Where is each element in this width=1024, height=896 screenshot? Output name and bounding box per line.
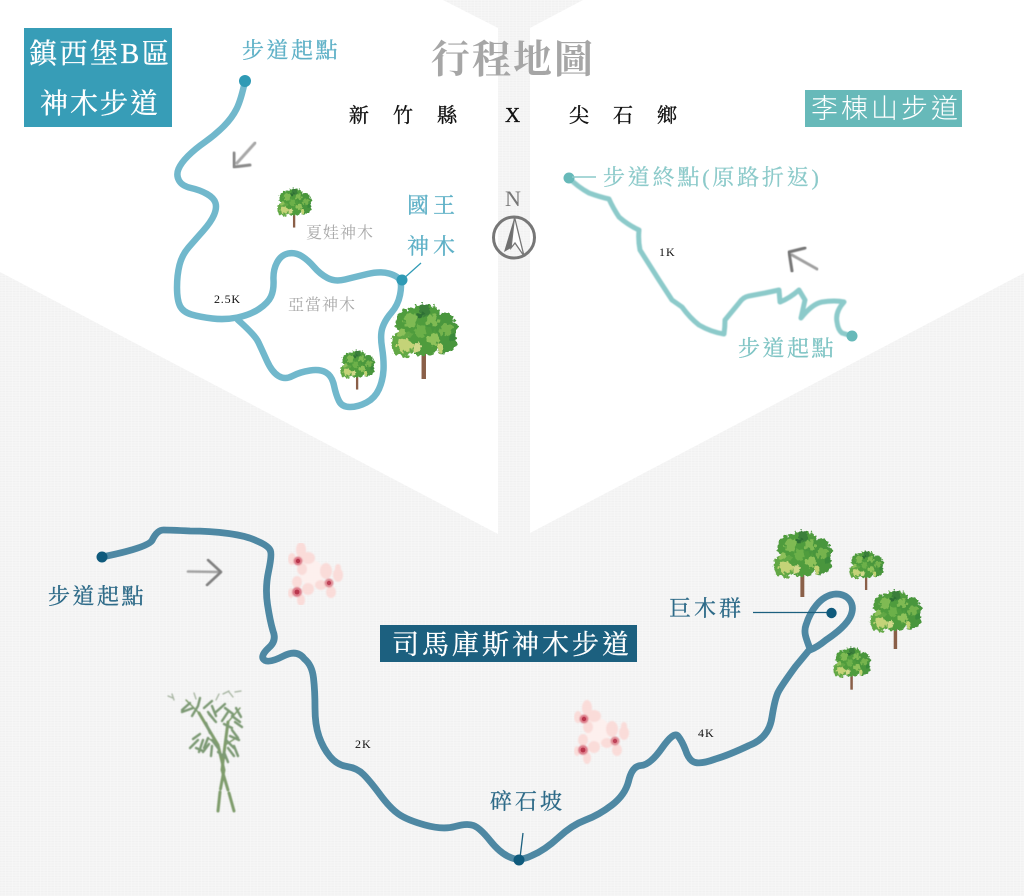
leader line and marker: King tree (396, 263, 421, 286)
compass: N (505, 186, 521, 211)
end point marker (564, 172, 596, 184)
subtitle: county and township: 新竹縣 (349, 104, 481, 127)
heading box: Smangus: 司馬庫斯神木步道 (392, 630, 632, 660)
tree group: giant trees (773, 531, 921, 690)
label: distance 4K: 4K (698, 726, 715, 740)
tree: Eve (277, 188, 311, 228)
label: King sacred tree: 神木 (407, 234, 459, 259)
start point marker (239, 75, 251, 87)
label: trail start: 步道起點 (242, 38, 340, 63)
label: distance 2.5K: 2.5K (214, 292, 241, 306)
white panel: left upper region (0, 0, 498, 534)
label: trail start: 步道起點 (48, 584, 146, 609)
label: distance 2K: 2K (355, 737, 372, 751)
subtitle: county and township: X (505, 103, 520, 127)
label: King sacred tree (407, 193, 459, 259)
trail line: Smangus (102, 530, 852, 859)
direction arrow (188, 560, 221, 585)
panel: Smangus trail (48, 530, 921, 866)
tree: Adam (340, 350, 374, 390)
bamboo (168, 691, 242, 811)
heading box: Zhenxibao: 神木步道 (40, 88, 160, 120)
heading box: Lidong: 李棟山步道 (811, 94, 961, 124)
label: Eve sacred tree: 夏娃神木 (306, 224, 374, 242)
label: gravel slope: 碎石坡 (490, 789, 565, 814)
blossom cluster: upper (288, 542, 343, 606)
compass (494, 186, 534, 258)
subtitle: county and township: 尖石鄉 (569, 104, 701, 127)
direction arrow (789, 248, 817, 271)
trail line: Lidong (569, 178, 852, 336)
subtitle: county and township (349, 103, 701, 127)
leader line and marker: gravel slope (514, 833, 524, 866)
direction arrow (234, 143, 255, 167)
label: King sacred tree: 國王 (407, 193, 459, 218)
start point marker (96, 552, 108, 562)
heading box: Zhenxibao (24, 28, 172, 127)
panel: Lidong mountain trail (564, 90, 962, 361)
label: giant trees: 巨木群 (669, 596, 744, 621)
trail line: Zhenxibao (177, 81, 401, 407)
label: trail end: 步道終點(原路折返) (603, 165, 822, 190)
white panel: right upper region (530, 0, 1024, 533)
label: trail start: 步道起點 (738, 336, 836, 361)
tree: King (391, 304, 457, 379)
panel: Zhenxibao B trail (24, 28, 459, 407)
label: Adam sacred tree: 亞當神木 (288, 296, 356, 314)
blossom cluster: lower (574, 700, 629, 764)
title: 行程地圖 (431, 39, 595, 82)
start point marker (846, 330, 858, 342)
heading box: Zhenxibao: 鎮西堡B區 (29, 38, 172, 70)
leader line and marker: giant trees (753, 608, 837, 618)
label: distance 1K: 1K (659, 245, 676, 259)
